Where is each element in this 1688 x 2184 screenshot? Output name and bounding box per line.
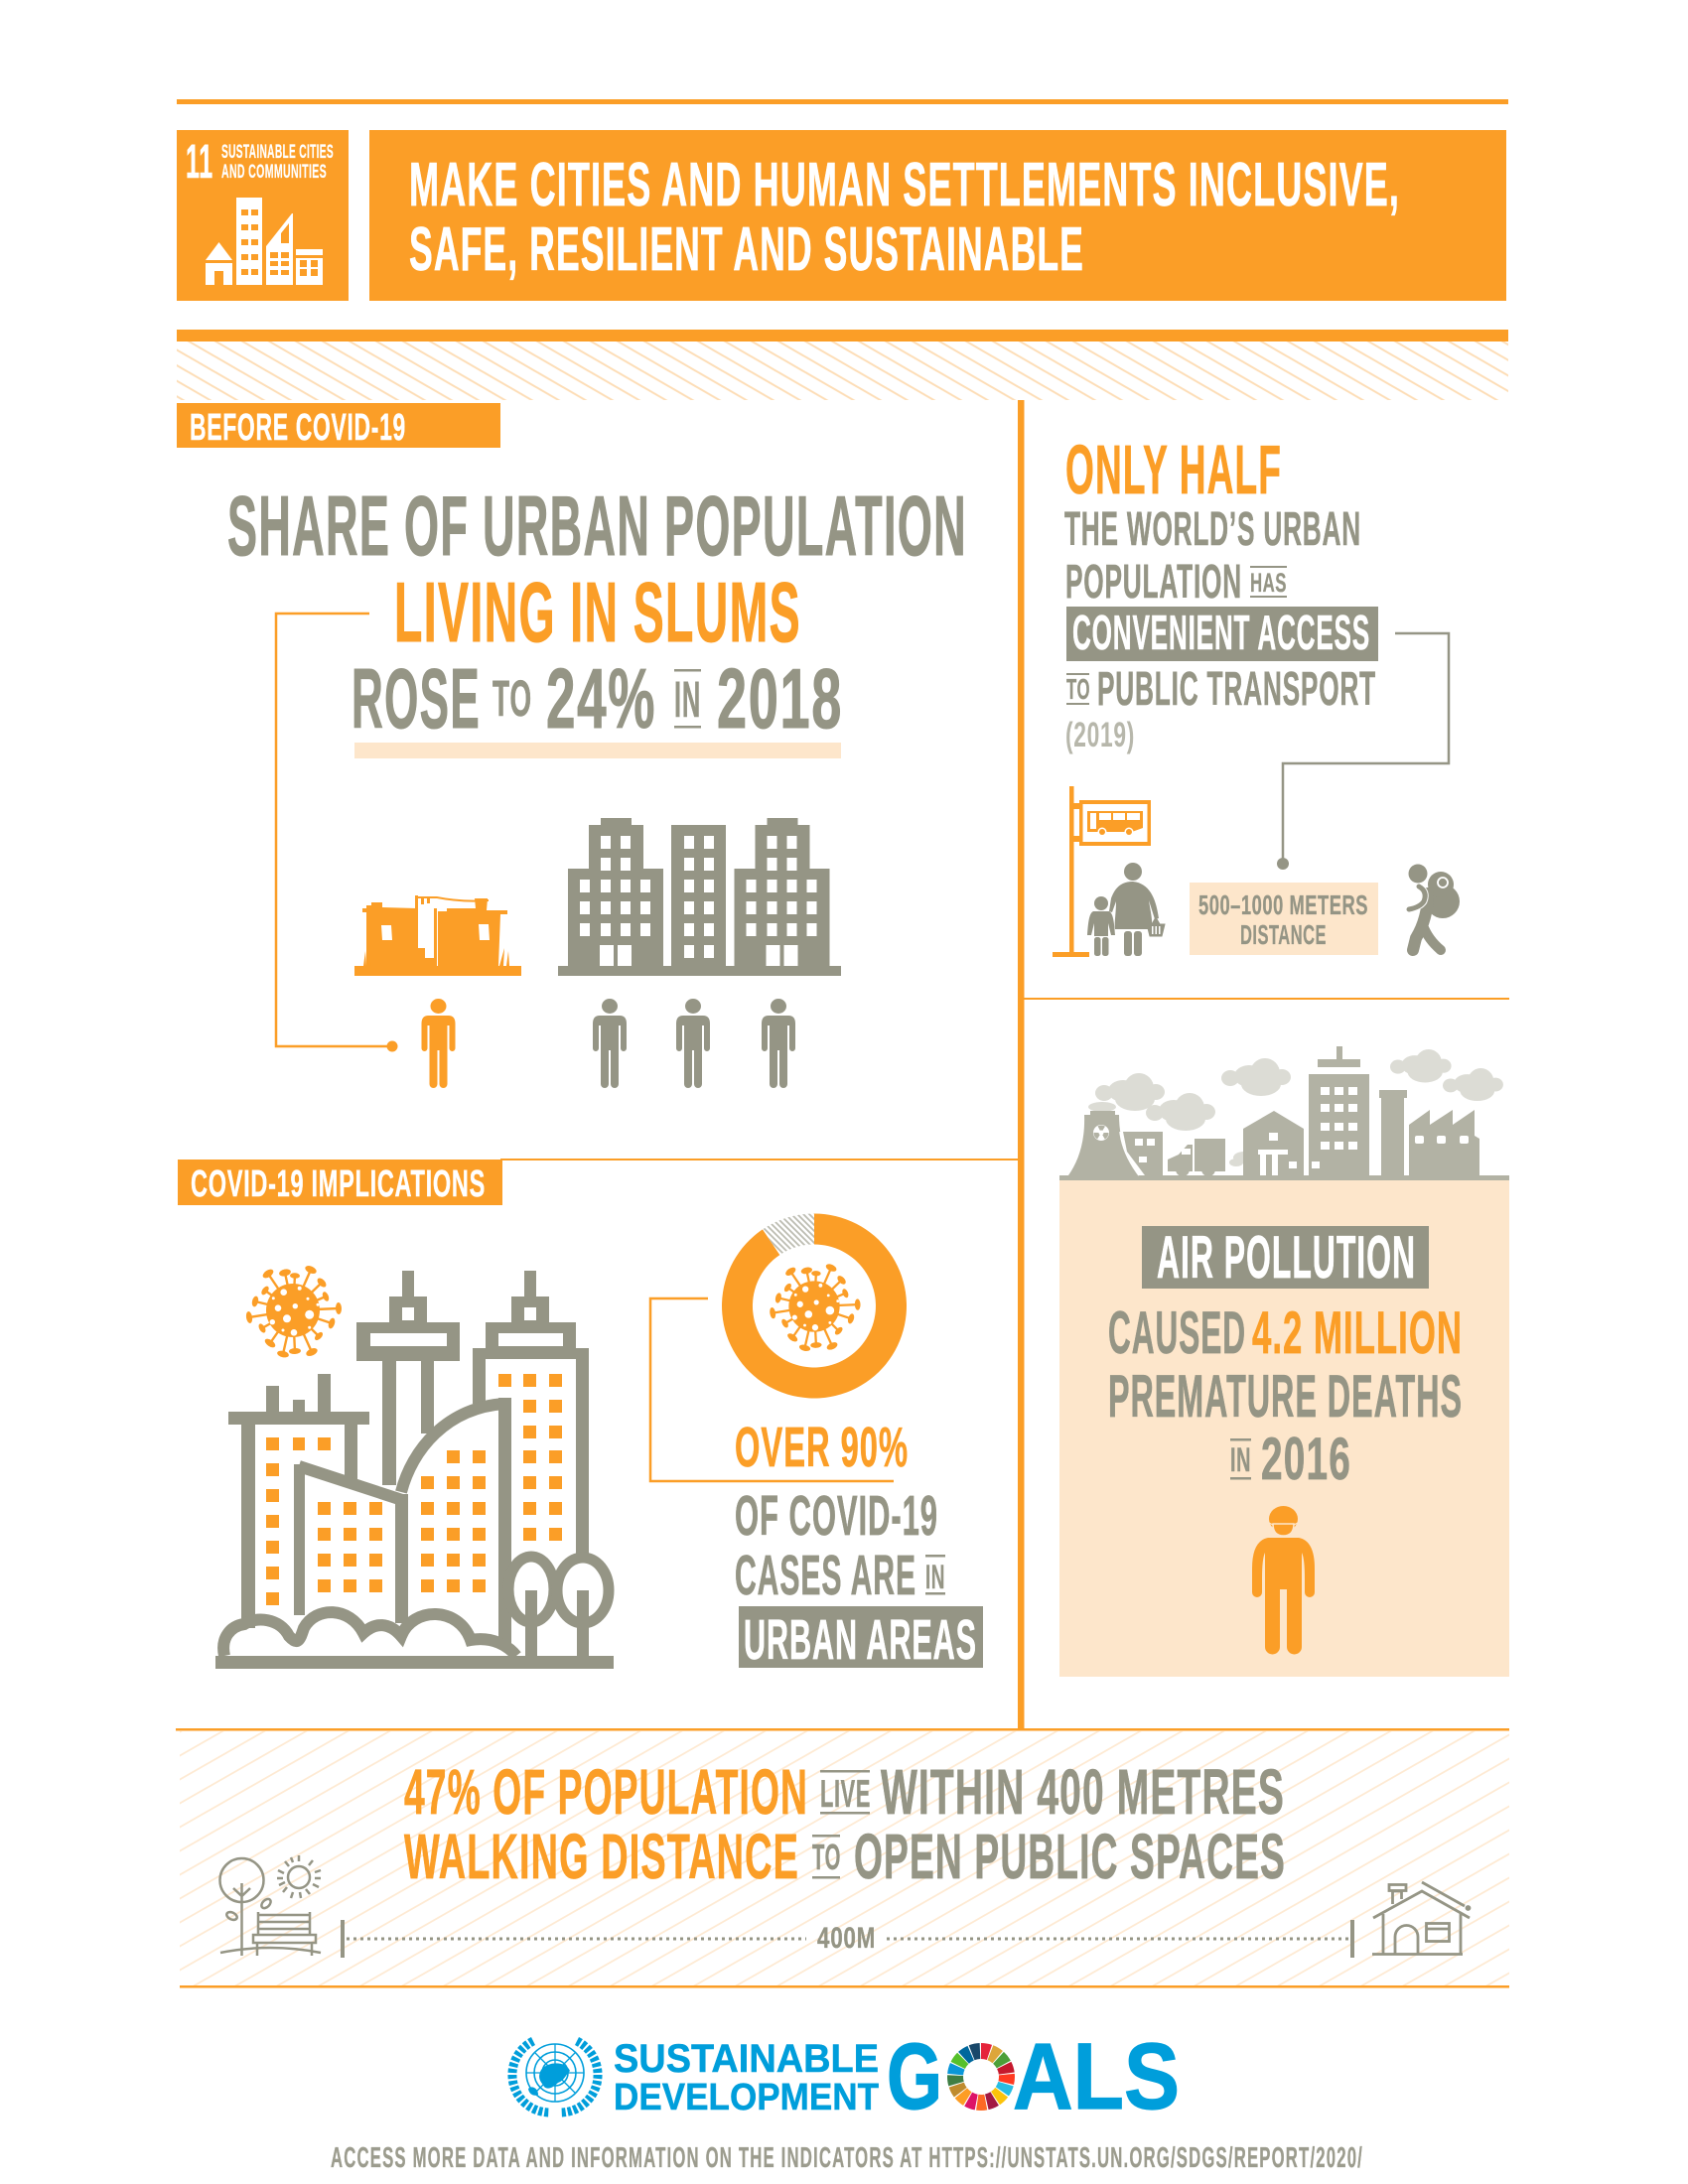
statement text: WITHIN 400 METRES <box>881 1756 1285 1828</box>
panel: before COVID-19 <box>177 403 967 1088</box>
icon: park with tree, sun and bench <box>220 1855 321 1956</box>
goal name <box>221 142 334 183</box>
connector: access to distance <box>1277 633 1449 870</box>
heading: slums: ROSE <box>352 651 481 747</box>
highlight bar <box>354 743 841 758</box>
donut chart: over 90 percent <box>722 1213 907 1399</box>
icon: UN emblem <box>512 2041 598 2113</box>
statement text: POPULATION <box>1065 556 1242 609</box>
icon: slum houses <box>354 895 521 976</box>
statistic text: OVER 90% <box>735 1417 909 1479</box>
icon: three other people <box>593 999 795 1088</box>
icon: person in slum <box>421 999 455 1088</box>
top rule <box>177 99 1508 104</box>
distance callout <box>1190 883 1378 955</box>
statement text: 47% OF POPULATION <box>404 1756 808 1828</box>
icon: formal buildings <box>558 818 841 976</box>
section tag: BEFORE COVID-19 <box>190 407 406 449</box>
statistic text: URBAN AREAS <box>744 1609 977 1672</box>
wordmark: sustainable development: SUSTAINABLE <box>614 2037 879 2081</box>
wordmark: goals: G <box>887 2024 942 2129</box>
icon: SDG colour wheel <box>944 2040 1018 2114</box>
statistic text: IN <box>925 1559 945 1596</box>
distance callout: DISTANCE <box>1240 919 1327 950</box>
statement text: WALKING DISTANCE <box>404 1821 799 1892</box>
statement text <box>1108 1299 1463 1492</box>
statement text: CONVENIENT ACCESS <box>1072 607 1370 660</box>
distance callout: 500–1000 METERS <box>1198 889 1368 920</box>
icon: woman and child <box>1087 863 1165 956</box>
statement text: HAS <box>1250 568 1287 598</box>
statement text <box>404 1756 1286 1892</box>
label: air pollution <box>1142 1224 1429 1291</box>
statement text: 4.2 MILLION <box>1252 1299 1463 1366</box>
heading: slums: LIVING IN SLUMS <box>394 565 801 660</box>
panel: air pollution <box>1059 1046 1509 1677</box>
logo: Sustainable Development Goals <box>512 2024 1180 2129</box>
statement text: CAUSED <box>1108 1299 1246 1366</box>
statement text: PUBLIC TRANSPORT <box>1097 663 1376 716</box>
wordmark: goals: ALS <box>1013 2024 1180 2129</box>
statement text: (2019) <box>1065 716 1135 754</box>
SDG 11 goal badge <box>177 130 349 301</box>
statistic text: CASES ARE <box>735 1545 916 1607</box>
label: air pollution: AIR POLLUTION <box>1157 1224 1416 1291</box>
illustration: polluted skyline <box>1059 1046 1509 1180</box>
statement text <box>1064 431 1378 754</box>
distance scale: 400M: 400M <box>817 1922 876 1955</box>
icon: city buildings <box>206 198 323 285</box>
goal name: SUSTAINABLE CITIES <box>221 142 334 163</box>
statement text: IN <box>1230 1441 1251 1479</box>
section tag <box>178 1160 502 1205</box>
panel: open public spaces <box>176 1728 1509 1987</box>
heading: slums <box>227 478 967 747</box>
statement text: OPEN PUBLIC SPACES <box>854 1821 1286 1892</box>
statement text: TO <box>812 1837 841 1877</box>
icon: bus stop <box>1053 786 1151 957</box>
statistic text: OF COVID-19 <box>735 1485 938 1548</box>
icon: virus in donut <box>769 1263 861 1352</box>
icon: virus <box>245 1264 342 1358</box>
goal name: AND COMMUNITIES <box>221 162 327 183</box>
icon: house <box>1372 1882 1470 1954</box>
statement text: ONLY HALF <box>1065 431 1282 508</box>
wordmark: sustainable development: DEVELOPMENT <box>614 2077 879 2118</box>
heading: slums: IN <box>674 671 701 728</box>
panel: COVID-19 implications <box>178 1160 983 1672</box>
title banner: SAFE, RESILIENT AND SUSTAINABLE <box>409 214 1084 284</box>
section tag: COVID-19 IMPLICATIONS <box>191 1163 486 1205</box>
wordmark: goals <box>887 2024 1180 2129</box>
statistic text <box>735 1417 983 1672</box>
title banner <box>369 130 1506 301</box>
statement text: LIVE <box>820 1773 871 1816</box>
illustration: city skyline <box>215 1271 614 1669</box>
distance scale: 400M <box>341 1920 1354 1958</box>
statement text: TO <box>1066 674 1090 706</box>
heading: slums: SHARE OF URBAN POPULATION <box>227 478 967 574</box>
peach background <box>1059 1180 1509 1677</box>
heading: slums: TO <box>492 670 532 727</box>
wordmark: sustainable development <box>614 2037 879 2118</box>
heading: slums: 2018 <box>717 651 843 747</box>
connector: slum to person <box>276 614 397 1052</box>
panel: public transport <box>1053 431 1460 957</box>
panel frame lines <box>500 400 1509 1729</box>
statement text: 2016 <box>1261 1426 1351 1492</box>
goal number: 11 <box>186 136 213 189</box>
icon: person wearing mask <box>1252 1506 1315 1655</box>
statement text: THE WORLD’S URBAN <box>1064 503 1361 556</box>
connector: donut to statistic <box>650 1298 894 1481</box>
heading: slums: 24% <box>546 651 656 747</box>
icon: hiker with backpack <box>1408 864 1460 950</box>
thick rule and hatched band <box>177 330 1508 400</box>
